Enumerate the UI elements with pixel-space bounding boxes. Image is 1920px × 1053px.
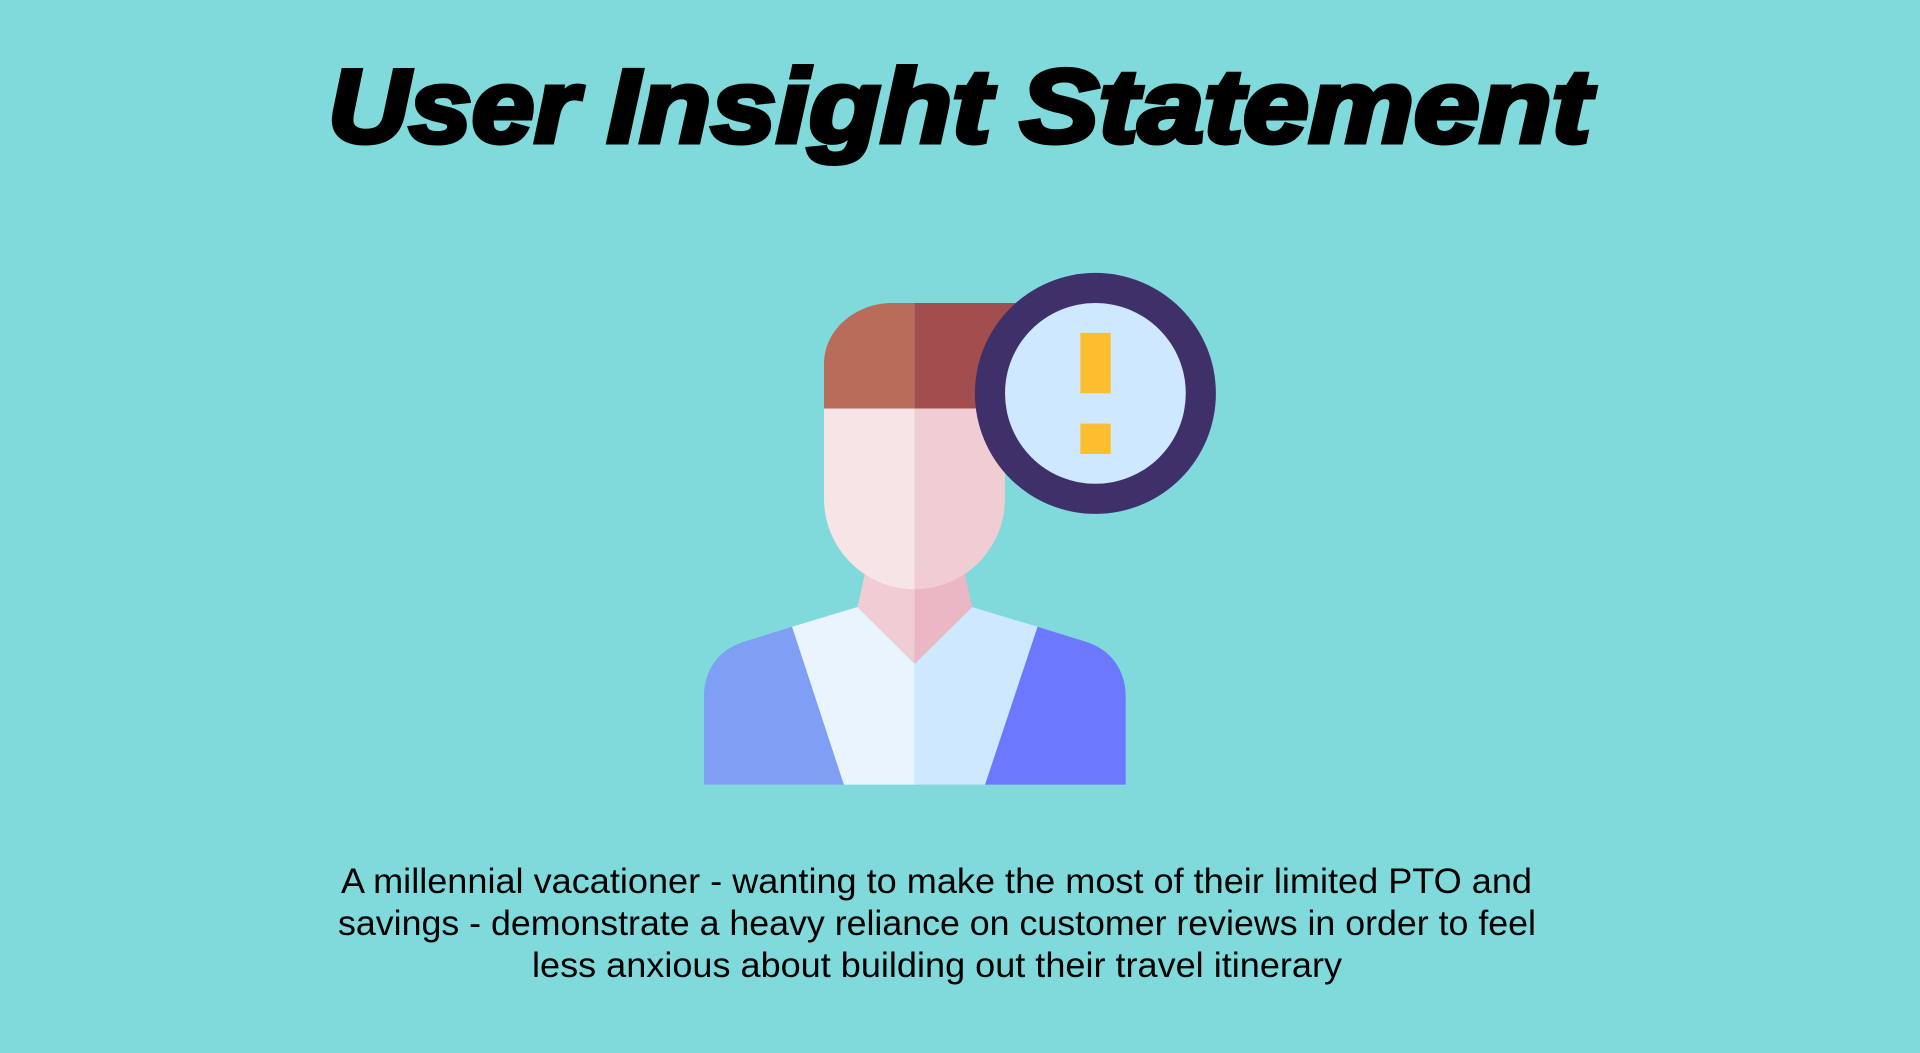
title: User	[328, 49, 584, 165]
hair left	[824, 303, 915, 408]
neck left	[858, 570, 915, 664]
exclamation dot	[1080, 424, 1111, 454]
icon: person with alert badge	[704, 273, 1216, 785]
face left	[824, 408, 915, 589]
shirt left	[792, 607, 915, 785]
alert badge face	[1005, 303, 1186, 484]
title	[328, 49, 1596, 165]
title: Statement	[1020, 49, 1596, 165]
insight statement text	[338, 862, 1536, 985]
body right sleeve	[985, 627, 1126, 785]
neck right	[915, 570, 972, 664]
face right	[915, 408, 1005, 589]
exclamation bar	[1080, 333, 1111, 393]
shirt right	[915, 607, 1038, 785]
hair right	[915, 303, 1040, 408]
body left sleeve	[704, 627, 844, 785]
insight statement text: savings - demonstrate a heavy reliance on customer reviews in order to feel	[338, 904, 1536, 943]
insight statement text: A millennial vacationer - wanting to make the most of their limited PTO and	[341, 862, 1532, 901]
insight statement text: less anxious about building out their travel itinerary	[532, 946, 1343, 985]
alert badge ring	[975, 273, 1216, 514]
title: Insight	[607, 49, 996, 165]
